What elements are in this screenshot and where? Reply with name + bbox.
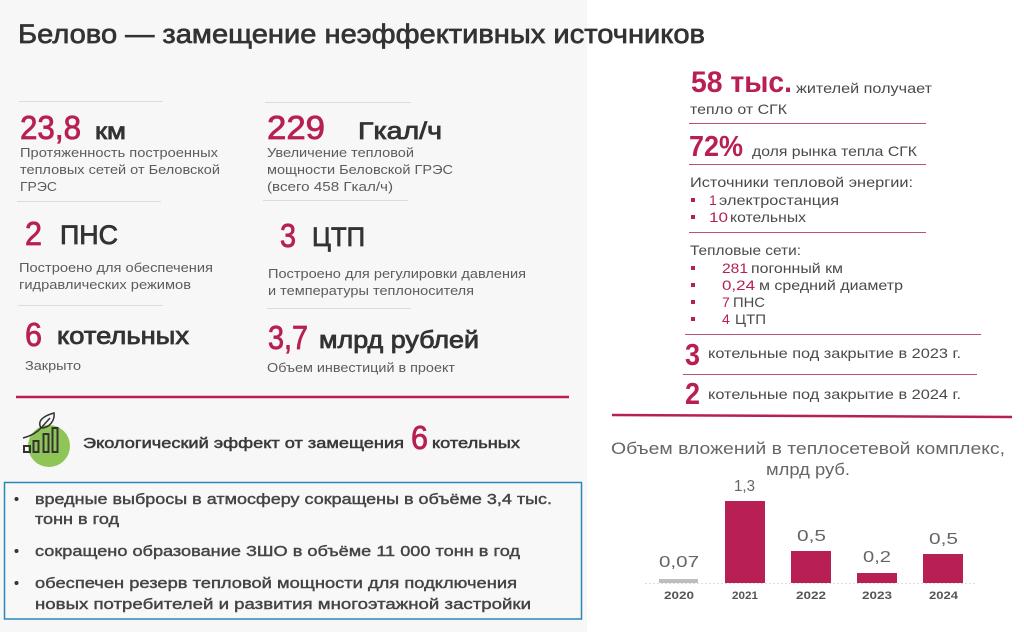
stat: 229 Гкал/ч: Гкал/ч xyxy=(358,118,442,145)
stat: 72%: 72% xyxy=(689,131,743,163)
stat: 2 ПНС xyxy=(19,215,213,292)
stat: 58 тыс. xyxy=(690,66,933,117)
stat: 3 ЦТП xyxy=(268,217,526,298)
panel: eco effects: вредные выбросы в атмосферу сокращены в объёме 3,4 тыс. xyxy=(35,491,552,508)
stat: 3,7 млрд рублей xyxy=(267,319,479,375)
list: heat networks: 281 xyxy=(722,260,748,276)
stat: 6 котельных: Закрыто xyxy=(25,358,81,373)
stat: 2 ПНС: Построено для обеспечения xyxy=(19,260,213,275)
list: heat sources: 10 xyxy=(709,209,728,225)
stat: 23,8 км: км xyxy=(95,118,126,144)
stat: 229 Гкал/ч: (всего 458 Гкал/ч) xyxy=(267,179,393,194)
list: heat sources: электростанция xyxy=(719,192,839,208)
stat: 58 тыс.: тепло от СГК xyxy=(690,101,788,117)
list: heat networks: ЦТП xyxy=(735,311,766,327)
stat: 3 ЦТП: 3 xyxy=(280,217,296,254)
chart title: млрд руб. xyxy=(766,460,850,479)
list: heat networks: погонный км xyxy=(751,260,843,276)
title: Белово — замещение неэффективных источников xyxy=(18,19,705,49)
stat: 2 ПНС: 2 xyxy=(25,215,42,252)
bar chart: 0,2 xyxy=(863,549,891,566)
stat: 229 Гкал/ч: Увеличение тепловой xyxy=(267,145,414,160)
panel: eco effects: обеспечен резерв тепловой мощности для подключения xyxy=(35,575,517,592)
eco heading: Экологический эффект от замещения xyxy=(83,435,404,452)
panel: eco effects xyxy=(4,482,582,619)
panel: eco effects: новых потребителей и развития многоэтажной застройки xyxy=(35,596,531,613)
stat: 3 ЦТП: Построено для регулировки давления xyxy=(268,266,526,281)
stat: 72%: доля рынка тепла СГК xyxy=(752,143,918,159)
stat: closures 2024 xyxy=(685,376,961,411)
bar chart: 1,3 xyxy=(734,478,755,495)
bar chart: 2021 xyxy=(732,590,758,602)
list: heat networks: Тепловые сети: xyxy=(690,242,801,258)
list: heat networks: 7 xyxy=(722,294,730,310)
stat: closures 2023: котельные под закрытие в 2023 г. xyxy=(708,345,961,361)
stat: 3 ЦТП: ЦТП xyxy=(312,222,365,252)
bar chart: 2024 xyxy=(929,590,959,602)
stat: 23,8 км: ГРЭС xyxy=(20,179,57,194)
stat: closures 2023: 3 xyxy=(685,337,700,372)
stat: 3,7 млрд рублей: Объем инвестиций в проект xyxy=(267,360,455,375)
stat: 23,8 км: Протяженность построенных xyxy=(20,145,219,160)
stat: 3,7 млрд рублей: 3,7 xyxy=(268,319,308,356)
stat: closures 2024: 2 xyxy=(685,376,700,411)
stat: 58 тыс.: жителей получает xyxy=(796,80,933,96)
bar chart xyxy=(645,478,976,602)
stat: 6 котельных: 6 xyxy=(25,316,42,353)
eco heading: котельных xyxy=(432,435,521,452)
chart title: Объем вложений в теплосетевой комплекс, xyxy=(611,439,1005,458)
stat: 2 ПНС: гидравлических режимов xyxy=(19,277,191,292)
stat: 72% xyxy=(689,131,918,163)
stat: 58 тыс.: 58 тыс. xyxy=(691,66,792,99)
stat: 3 ЦТП: и температуры теплоносителя xyxy=(268,283,474,298)
list: heat networks: 0,24 xyxy=(722,277,755,293)
stat: 23,8 км xyxy=(20,109,220,194)
list: heat networks xyxy=(690,242,903,327)
stat: 23,8 км: 23,8 xyxy=(20,109,81,146)
stat: 3,7 млрд рублей: млрд рублей xyxy=(319,327,479,354)
list: heat sources: котельных xyxy=(730,209,806,225)
stat: closures 2024: котельные под закрытие в 2024 г. xyxy=(708,386,961,402)
stat: 229 Гкал/ч xyxy=(267,109,453,194)
stat: 6 котельных xyxy=(25,316,189,373)
bar chart: 0,5 xyxy=(797,528,826,545)
eco heading xyxy=(83,419,521,456)
bar chart: 2023 xyxy=(862,590,892,602)
panel: eco effects: тонн в год xyxy=(35,511,119,528)
stat: 229 Гкал/ч: мощности Беловской ГРЭС xyxy=(267,162,453,177)
stat: 23,8 км: тепловых сетей от Беловской xyxy=(20,162,220,177)
bar chart: 2022 xyxy=(796,590,826,602)
list: heat networks: м средний диаметр xyxy=(759,277,903,293)
list: heat sources: Источники тепловой энергии: xyxy=(690,174,913,190)
stat: closures 2023 xyxy=(685,337,961,372)
bar chart: 0,5 xyxy=(929,531,958,548)
chart title xyxy=(611,439,1005,479)
list: heat networks: 4 xyxy=(722,311,730,327)
stat: 2 ПНС: ПНС xyxy=(60,220,118,250)
list: heat sources: 1 xyxy=(709,192,717,208)
bar chart: 2020 xyxy=(664,590,694,602)
panel: eco effects: сокращено образование ЗШО в объёме 11 000 тонн в год xyxy=(35,543,520,560)
list: heat networks: ПНС xyxy=(733,294,765,310)
eco heading: 6 xyxy=(411,419,428,456)
icon: eco growth chart with leaf xyxy=(23,413,70,467)
stat: 6 котельных: котельных xyxy=(57,323,189,350)
stat: 229 Гкал/ч: 229 xyxy=(267,109,325,146)
list: heat sources xyxy=(690,174,913,225)
bar chart: 0,07 xyxy=(659,554,699,571)
